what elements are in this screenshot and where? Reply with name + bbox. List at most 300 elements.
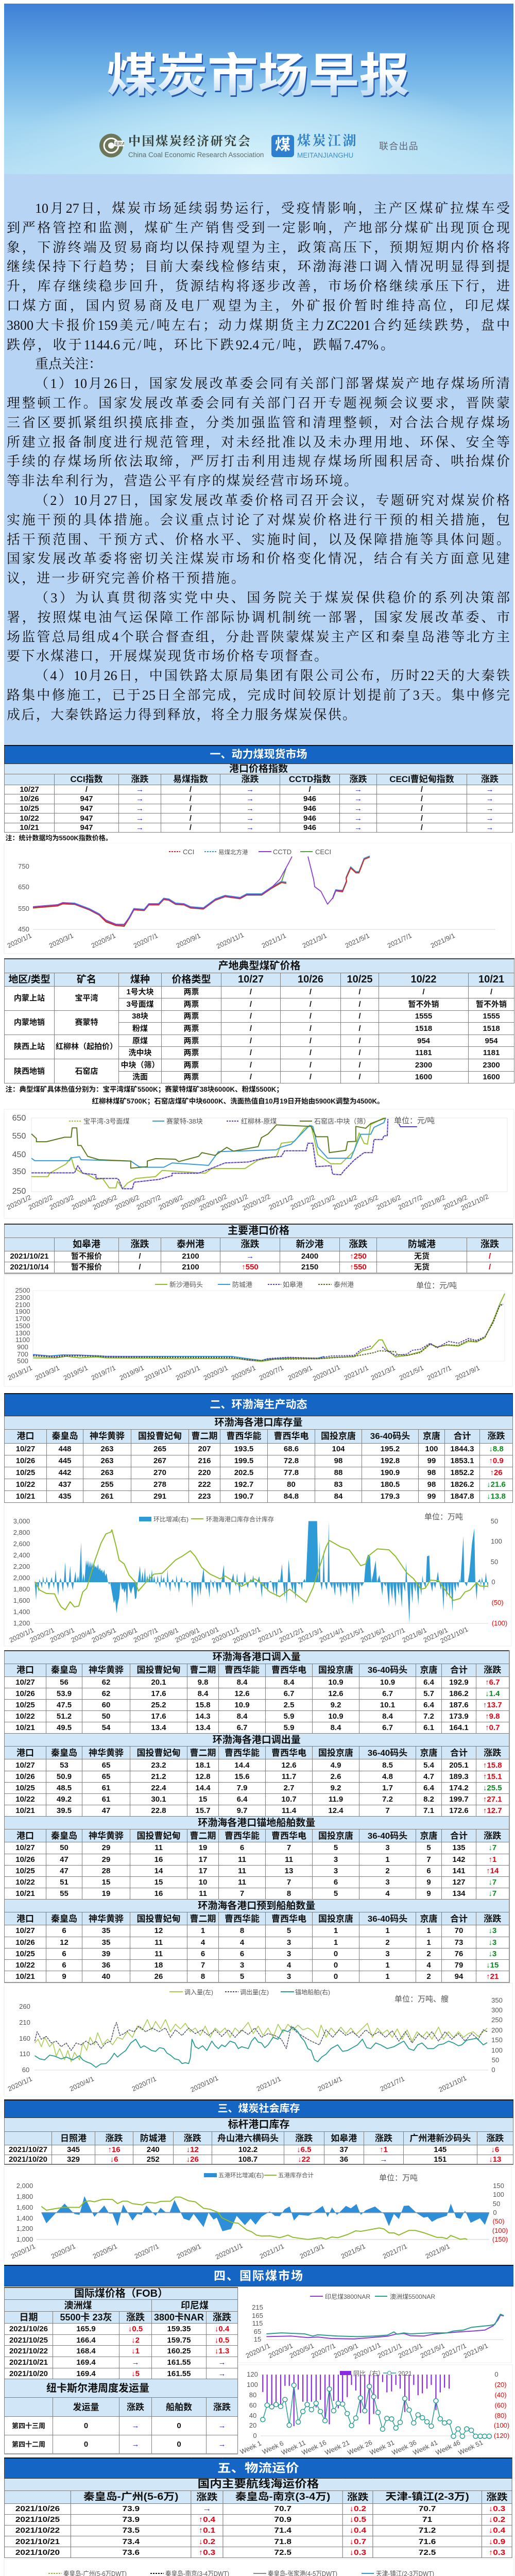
section heading: 二、环渤海生产动态	[210, 1399, 307, 1411]
x axis labels: 2020/4/1	[68, 2075, 95, 2093]
left axis labels: 0	[253, 2432, 257, 2439]
panel: bohai flow and ship tables: 17	[199, 1855, 207, 1864]
panel: typical mine price table: 两票	[183, 1000, 199, 1009]
x axis labels: 2019/9/1	[118, 1364, 145, 1382]
panel: international coal price and shipments table: 2021/10/20	[9, 2369, 48, 2378]
section heading: ↓6	[110, 2155, 118, 2164]
section heading: 易煤指数	[173, 774, 208, 784]
chart legend: 锚地船舶(右)	[295, 1988, 330, 1996]
chart: main port prices trend	[4, 1275, 512, 1386]
text block: market commentary: 升，库存继续稳步回升，货源结构将逐步改善，市场价格继续承压下行，进	[7, 279, 510, 294]
panel: typical mine price table: 粉煤	[132, 1024, 148, 1033]
section heading: 207	[198, 1445, 211, 1453]
right axis labels	[491, 1996, 503, 2074]
panel: bohai flow and ship tables: 1	[201, 1926, 205, 1935]
section heading: →	[354, 785, 362, 794]
panel: bohai flow and ship tables: 141	[452, 1867, 466, 1875]
left axis labels: 120	[247, 2370, 258, 2378]
left axis labels: 1,000	[16, 2235, 33, 2243]
right axis labels	[494, 2370, 509, 2439]
section heading: →	[486, 794, 493, 803]
section heading	[5, 1394, 512, 1501]
panel: bohai flow and ship tables: 12.6	[234, 1689, 250, 1698]
x axis labels: 2020/3/1	[267, 2342, 294, 2360]
chart legend: 环渤海港口库存合计库存	[206, 1515, 274, 1523]
x axis labels: 2021/4/2	[332, 1193, 358, 1211]
panel: typical mine price table: /	[358, 1048, 361, 1057]
section heading: ↓13.8	[487, 1492, 506, 1501]
section heading: 77.8	[284, 1468, 299, 1477]
panel: international coal price and shipments table: 161.55	[167, 2369, 191, 2378]
panel: bohai flow and ship tables: ↑6.7	[485, 1678, 500, 1687]
panel: typical mine price table: 1181	[415, 1048, 432, 1057]
section heading: 涨跌	[131, 774, 148, 784]
x axis labels: 2021/3/2	[310, 1193, 336, 1211]
right axis labels: 0	[493, 2209, 497, 2216]
section heading: 947	[80, 804, 93, 813]
panel: bohai flow and ship tables: 15	[199, 1795, 207, 1804]
panel: bohai flow and ship tables: 0	[334, 1972, 338, 1981]
section heading: 防城港	[140, 2133, 166, 2143]
panel: bohai flow and ship tables: 1	[334, 1926, 338, 1935]
flow lines	[35, 2020, 487, 2067]
panel: bohai flow and ship tables: 21.2	[151, 1772, 166, 1781]
panel: bohai flow and ship tables: 港口	[16, 1914, 34, 1924]
panel: typical mine price table: /	[250, 1000, 252, 1009]
panel: bohai flow and ship tables: 30.1	[151, 1795, 166, 1804]
section heading: 947	[80, 814, 93, 823]
panel: bohai flow and ship tables: 国投京唐	[318, 1748, 353, 1758]
panel: bohai flow and ship tables: 秦皇岛	[51, 1665, 77, 1675]
y axis labels: 650	[18, 883, 29, 891]
panel: bohai flow and ship tables: 曹二期	[190, 1748, 216, 1758]
panel: bohai flow and ship tables: 15.8	[195, 1701, 211, 1709]
panel: bohai flow and ship tables: 4	[426, 1961, 431, 1970]
y axis labels: 15	[254, 2335, 261, 2343]
text block: market commentary: 等非法牟利行为，营造公平有序的煤炭经营市场环境。	[7, 473, 357, 488]
panel: bohai flow and ship tables: 3	[287, 1972, 291, 1981]
panel: bohai flow and ship tables: 16	[154, 1889, 163, 1898]
panel: bohai flow and ship tables: 94	[455, 1972, 463, 1981]
section heading: 10/25	[20, 804, 39, 813]
panel: bohai flow and ship tables: 12.8	[195, 1772, 211, 1781]
x axis labels: 2021/9/1	[422, 1626, 449, 1644]
panel: typical mine price table: /	[250, 1037, 252, 1045]
section heading: 10/25	[16, 1468, 35, 1477]
panel: typical mine price table: 煤种	[130, 974, 150, 985]
section heading: 涨跌	[241, 774, 259, 784]
section heading: ↓6.5	[297, 2145, 311, 2154]
x axis labels: 2020/5/1	[90, 931, 117, 950]
panel: typical mine price table: 暂不外销	[408, 1000, 439, 1009]
right axis labels: (100)	[492, 2227, 508, 2234]
panel: bohai flow and ship tables: 3	[334, 1855, 338, 1864]
panel: bohai flow and ship tables: 11	[238, 1878, 246, 1887]
logo: meitanjianghu	[271, 135, 294, 157]
panel: bohai flow and ship tables: 9.8	[198, 1678, 208, 1687]
panel: bohai flow and ship tables: 22.8	[151, 1806, 166, 1815]
panel: bohai flow and ship tables: 京唐	[420, 1748, 438, 1758]
chart legend	[48, 2570, 434, 2576]
panel: bohai flow and ship tables: 神华黄骅	[89, 1831, 124, 1841]
panel: bohai flow and ship tables: 10/22	[15, 1712, 35, 1721]
panel: bohai flow and ship tables: 35	[102, 1938, 110, 1947]
panel: bohai flow and ship tables: 22.4	[151, 1784, 166, 1792]
left axis labels: 2,800	[13, 1529, 30, 1536]
section heading: 2021/10/20	[15, 2548, 60, 2557]
x axis labels: 2021/6/1	[359, 1626, 386, 1644]
panel: bohai flow and ship tables: 192.9	[449, 1678, 469, 1687]
x axis labels: 2019/1/1	[7, 1364, 33, 1382]
right axis labels: 0	[491, 1578, 495, 1586]
right axis labels: (50)	[492, 2217, 505, 2225]
panel: bohai flow and ship tables: 13.4	[151, 1723, 166, 1732]
panel: bohai flow and ship tables: 国投京唐	[318, 1914, 353, 1924]
section heading: 199.5	[234, 1456, 253, 1465]
section heading: 252	[147, 2155, 160, 2164]
text block: market commentary: 10月27日，煤炭市场延续弱势运行，受疫情影响，主产区煤矿拉煤车受	[35, 201, 510, 216]
panel: international coal price and shipments table: 澳洲煤	[64, 2300, 92, 2311]
section heading: 涨跌	[184, 2133, 201, 2143]
section heading: CCTD指数	[289, 774, 331, 784]
panel: typical mine price table: 红柳林煤矿5700K；石窑店煤矿中块6000K、洗面热值自10月19日开始由5900K调整为4500K。	[92, 1097, 384, 1105]
section heading: 180.5	[381, 1480, 400, 1489]
section heading: international coal market: 四、国际煤市场	[214, 2269, 304, 2282]
panel: bohai flow and ship tables: 10	[199, 1878, 207, 1887]
y axis labels: 350	[12, 1167, 26, 1176]
panel: typical mine price table: /	[358, 1000, 361, 1009]
panel: bohai flow and ship tables: 曹二期	[190, 1831, 216, 1841]
panel: typical mine price table: 内蒙地销	[14, 1018, 45, 1027]
panel: bohai flow and ship tables: 涨跌	[484, 1914, 501, 1924]
section heading: ↓21.6	[487, 1480, 506, 1489]
index lines	[33, 856, 370, 926]
panel: bohai flow and ship tables: 17.6	[151, 1689, 166, 1698]
panel: bohai flow and ship tables: 6	[62, 1926, 66, 1935]
x axis labels: 2020/9/1	[333, 2342, 359, 2360]
chart legend: 防城港	[232, 1281, 252, 1289]
section heading: 涨跌	[295, 2133, 313, 2143]
panel: bohai flow and ship tables: 10/22	[15, 1961, 35, 1970]
panel: bohai flow and ship tables: 50	[60, 1843, 68, 1852]
panel: international coal price and shipments table: ↓1.3	[215, 2347, 229, 2355]
panel: bohai flow and ship tables: ↑13.7	[483, 1701, 502, 1709]
section heading: /	[190, 785, 192, 794]
x axis labels: 2020/7/1	[258, 1364, 285, 1382]
panel: bohai flow and ship tables: 10/22	[15, 1795, 35, 1804]
x axis labels: 2020/12/1	[231, 1625, 262, 1645]
panel: main port price table: 无货	[414, 1252, 430, 1261]
panel: international coal price and shipments table: ↓2	[131, 2336, 140, 2345]
panel: international coal price and shipments table: →	[218, 2440, 226, 2449]
section heading: 265	[153, 1445, 166, 1453]
panel: bohai flow and ship tables: 36-40码头	[368, 1914, 407, 1924]
panel: bohai flow and ship tables: 国投曹妃甸	[137, 1748, 180, 1758]
x axis labels: 2021/3/1	[301, 931, 328, 950]
chart legend	[169, 848, 331, 856]
text block: market commentary: （3）为认真贯彻落实党中央、国务院关于煤炭保供稳价的系列决策部	[35, 590, 510, 605]
panel: bohai flow and ship tables: 曹西华能	[225, 1914, 260, 1924]
section heading: 日照港	[60, 2133, 87, 2143]
x axis labels: 2020/2/1	[29, 1626, 56, 1644]
section heading: 1852.2	[451, 1468, 474, 1477]
section heading: 国内主要航线海运价格	[198, 2478, 319, 2490]
text block: market commentary: 国家发展改革委将密切关注煤炭市场和价格变化情况，结合有关方面意见建	[7, 551, 510, 566]
section heading: 72.8	[284, 1456, 299, 1465]
panel: bohai flow and ship tables: 10/25	[15, 1867, 35, 1875]
panel: bohai flow and ship tables: 8	[201, 1972, 205, 1981]
left axis labels: 3,000	[13, 1517, 30, 1525]
panel: bohai flow and ship tables: 国投京唐	[318, 1665, 353, 1675]
x axis labels: 2020/9/2	[180, 1193, 207, 1211]
section heading: ↓0.2	[489, 2515, 505, 2524]
section heading: ↓0.2	[349, 2504, 366, 2513]
chart legend	[169, 1988, 449, 2004]
panel: bohai flow and ship tables: 涨跌	[484, 1831, 501, 1841]
section heading: →	[486, 804, 493, 813]
panel: typical mine price table: 10/21	[478, 974, 504, 985]
panel: international coal price and shipments table: ↓0.4	[215, 2325, 229, 2333]
panel: typical mine price table: 注：典型煤矿具体热值分别为：宝平湾煤矿5500K；赛蒙特煤矿38块6000K、粉煤5500K；	[5, 1086, 283, 1093]
panel: bohai flow and ship tables: 4	[201, 1938, 205, 1947]
panel: bohai flow and ship tables: 6	[62, 1950, 66, 1958]
chart legend	[204, 2172, 418, 2182]
x axis labels: 2020/1/1	[8, 1626, 35, 1644]
x axis labels: 2021/2/1	[278, 1626, 305, 1644]
section heading: 环渤海各港口库存量	[215, 1417, 303, 1428]
panel: international coal price and shipments table: →	[218, 2421, 226, 2430]
x axis labels: 2020/12/2	[241, 1193, 271, 1212]
section heading: 36-40码头	[370, 1431, 410, 1441]
panel: main port price table: 涨跌	[349, 1239, 368, 1249]
panel: bohai flow and ship tables: 36	[102, 1961, 110, 1970]
panel: bohai flow and ship tables: 53.9	[57, 1689, 72, 1698]
section heading: 舟山港六横码头	[217, 2133, 279, 2143]
section heading: →	[486, 823, 493, 832]
x axis labels: 2020/5/1	[92, 2242, 118, 2260]
x axis labels: 2020/6/1	[112, 1626, 139, 1644]
panel: bohai flow and ship tables: 18	[154, 1961, 163, 1970]
panel: bohai flow and ship tables: 4.8	[382, 1772, 393, 1781]
panel: typical mine price table: 1518	[483, 1024, 500, 1033]
panel: bohai flow and ship tables: 186.2	[449, 1689, 469, 1698]
left axis labels	[247, 2370, 258, 2439]
panel: bohai flow and ship tables: 1	[385, 1961, 390, 1970]
left axis labels: 1,800	[13, 1585, 30, 1593]
organisation name: 中国煤炭经济研究会	[128, 135, 251, 148]
x axis labels: 2020/11/1	[211, 1625, 241, 1645]
panel: bohai flow and ship tables: 53	[60, 1761, 68, 1770]
panel: typical mine price table: /	[310, 1037, 312, 1045]
panel: main port price table: 泰州港	[177, 1239, 204, 1249]
text block: market commentary: 场监管总局组成4个联合督查组，分赴晋陕蒙煤炭主产区和秦皇岛港等北方主	[7, 630, 510, 645]
panel: bohai flow and ship tables: 4.7	[423, 1772, 434, 1781]
all charts layer	[4, 843, 514, 2576]
section heading: 80	[287, 1480, 296, 1489]
panel: bohai flow and ship tables: 5.4	[423, 1761, 434, 1770]
chart legend: 调入量(左)	[184, 1988, 213, 1996]
panel: bohai flow and ship tables: 4	[385, 1889, 390, 1898]
panel: international coal price and shipments table: ↓1	[131, 2347, 140, 2355]
x axis labels: 2020/5/1	[91, 1626, 117, 1644]
panel: bohai flow and ship tables: 环渤海各港口调入量	[213, 1652, 301, 1663]
x axis labels: 2021/2/2	[289, 1193, 316, 1211]
y axis labels: 700	[17, 1350, 28, 1358]
section heading: 99	[427, 1456, 436, 1465]
x axis labels: 2021/3/1	[299, 2242, 325, 2260]
left axis labels: 110	[20, 2050, 30, 2058]
panel: typical mine price table: /	[490, 988, 492, 996]
x axis labels: 2021/6/2	[375, 1193, 402, 1211]
y axis labels	[252, 2303, 263, 2343]
panel: bohai flow and ship tables: 9.2	[331, 1784, 341, 1792]
panel: bohai flow and ship tables: 2	[426, 1972, 431, 1981]
panel: bohai flow and ship tables: 17	[199, 1867, 207, 1875]
y axis labels: 1100	[15, 1336, 30, 1344]
panel: international coal price and shipments table: 0	[177, 2421, 181, 2430]
panel: port price index table	[4, 745, 513, 843]
section heading: 71	[422, 2515, 432, 2524]
section heading: 84	[334, 1492, 342, 1501]
section heading: 100	[425, 1445, 438, 1453]
panel: bohai flow and ship tables: 11.9	[329, 1795, 343, 1804]
x axis labels: 2020/3/1	[48, 931, 75, 950]
panel: bohai flow and ship tables: 187.6	[449, 1701, 469, 1709]
x axis labels: 2021/5/1	[419, 2342, 446, 2360]
panel: international coal price and shipments table: →	[132, 2421, 139, 2430]
section heading: 如皋港	[331, 2133, 357, 2143]
left axis labels: 2,000	[16, 2182, 33, 2190]
panel: bohai flow and ship tables: ↓3	[488, 1938, 496, 1947]
section heading: 216	[198, 1456, 211, 1465]
panel: bohai flow and ship tables: 6	[62, 1961, 66, 1970]
x axis labels: 2020/5/2	[92, 1193, 118, 1211]
section heading: 71.2	[419, 2526, 436, 2535]
x axis labels: 2020/3/1	[49, 1626, 76, 1644]
panel: typical mine price table: 2300	[415, 1061, 432, 1070]
panel: bohai flow and ship tables: 曹二期	[190, 1665, 216, 1675]
panel: bohai flow and ship tables: 12.6	[281, 1761, 297, 1770]
panel: bohai flow and ship tables: 合计	[450, 1831, 468, 1841]
panel: international coal price and shipments table: 涨跌	[213, 2312, 231, 2323]
section heading: 448	[58, 1445, 72, 1453]
panel: bohai flow and ship tables: 3	[334, 1867, 338, 1875]
panel: bohai flow and ship tables: 10/27	[15, 1678, 35, 1687]
x axis labels: 2021/3/1	[297, 1626, 324, 1644]
section heading: →	[354, 823, 362, 832]
panel: typical mine price table: 宝平湾	[75, 994, 98, 1003]
section heading: /	[421, 814, 423, 823]
left axis labels	[16, 2182, 33, 2243]
x axis labels: 2020/10/1	[190, 1625, 220, 1645]
x axis labels: 2021/3/1	[397, 2342, 424, 2360]
x axis labels: 2021/1/1	[257, 1626, 284, 1644]
section heading: 946	[303, 804, 316, 813]
panel: typical mine price table: 内蒙上站	[14, 994, 45, 1003]
right axis labels: (40)	[494, 2391, 507, 2399]
section heading: →	[246, 823, 254, 832]
x axis labels: 2021/4/1	[317, 2075, 344, 2093]
section heading: 98	[427, 1468, 436, 1477]
section heading: 220	[198, 1468, 211, 1477]
panel: bohai flow and ship tables: 11	[238, 1867, 246, 1875]
chart legend: CECI	[315, 848, 331, 856]
panel: bohai flow and ship tables: 10/22	[15, 1878, 35, 1887]
panel: bohai flow and ship tables: 65	[102, 1761, 110, 1770]
panel: bohai flow and ship tables: 4	[287, 1961, 291, 1970]
section heading: 2021/10/25	[15, 2515, 60, 2524]
chart: domestic freight	[4, 2559, 514, 2576]
y axis labels: 500	[17, 1357, 28, 1365]
panel: bohai flow and ship tables: 15	[154, 1878, 163, 1887]
panel: bohai flow and ship tables: 10/27	[15, 1761, 35, 1770]
panel: typical mine price table: 3号面煤	[126, 1000, 154, 1009]
panel: bohai flow and ship tables: ↓15	[486, 1961, 499, 1970]
text block: market commentary: 括干预范围、干预方式、价格水平、实施时间，以及保障措施等具体问题。	[7, 532, 510, 547]
panel: bohai flow and ship tables: 7.2	[423, 1712, 434, 1721]
panel: bohai flow and ship tables: 3	[240, 1961, 244, 1970]
panel: bohai flow and ship tables: 70	[455, 1926, 463, 1935]
panel: bohai flow and ship tables: 189.3	[449, 1772, 469, 1781]
panel: bohai flow and ship tables: 10/27	[15, 1843, 35, 1852]
panel: bohai flow and ship tables: 5.9	[284, 1712, 294, 1721]
panel: main port price table: 2021/10/21	[10, 1252, 49, 1261]
panel: typical mine price table: 石窑店	[75, 1067, 98, 1076]
x axis labels: 2020/4/1	[70, 1626, 97, 1644]
panel: bohai flow and ship tables: 10/25	[15, 1784, 35, 1792]
section heading: 71.6	[419, 2537, 436, 2546]
panel: bohai flow and ship tables: 127	[452, 1878, 466, 1887]
x axis labels: 2020/3/1	[202, 1364, 229, 1382]
section heading: ↓0.5	[349, 2515, 366, 2524]
panel: typical mine price table: 洗面	[132, 1073, 148, 1081]
text block: market commentary: 署，按照煤电油气运保障工作部际协调机制统一部署，国家发展改革委、市	[7, 610, 510, 625]
left axis labels: 100	[247, 2381, 258, 2388]
section heading: 84.8	[284, 1492, 299, 1501]
panel: bohai flow and ship tables: 8.4	[382, 1712, 393, 1721]
x axis labels: 2020/3/1	[50, 2242, 77, 2260]
panel: typical mine price table: 954	[485, 1037, 498, 1045]
x axis labels	[7, 2074, 468, 2094]
panel: international coal price and shipments table: 第四十三周	[12, 2422, 45, 2430]
panel: bohai flow and ship tables: 135	[452, 1843, 466, 1852]
panel: typical mine price table	[4, 958, 514, 1107]
panel: market summary text	[4, 174, 513, 745]
section heading: ↓12	[186, 2145, 199, 2154]
panel: bohai flow and ship tables: 11.4	[282, 1806, 296, 1815]
panel: bohai flow and ship tables: 6.4	[423, 1678, 434, 1687]
section heading: 秦皇岛-广州(5-6万)	[83, 2492, 179, 2502]
section heading: 37	[339, 2145, 348, 2154]
left axis labels: 1,200	[13, 1619, 30, 1627]
chart legend: 五港环比增减(右)	[218, 2172, 264, 2179]
panel: bohai flow and ship tables: 9	[426, 1878, 431, 1887]
x axis labels: 2020/7/1	[310, 2342, 337, 2360]
panel: bohai flow and ship tables: 8	[287, 1889, 291, 1898]
y axis labels: 750	[18, 862, 29, 870]
section heading: 36	[339, 2155, 348, 2164]
section heading: 98	[427, 1480, 436, 1489]
section heading: ↓8.8	[489, 1445, 504, 1453]
section heading: 329	[67, 2155, 80, 2164]
section heading: 345	[67, 2145, 80, 2154]
panel: typical mine price table: /	[250, 1048, 252, 1057]
section heading: 73.9	[122, 2515, 140, 2524]
panel: bohai flow and ship tables: 7	[287, 1878, 291, 1887]
panel: bohai flow and ship tables: 2.6	[331, 1772, 341, 1781]
panel: international coal price and shipments table: 第四十二周	[12, 2441, 45, 2448]
panel: bohai flow and ship tables: 曹西华电	[271, 1748, 306, 1758]
